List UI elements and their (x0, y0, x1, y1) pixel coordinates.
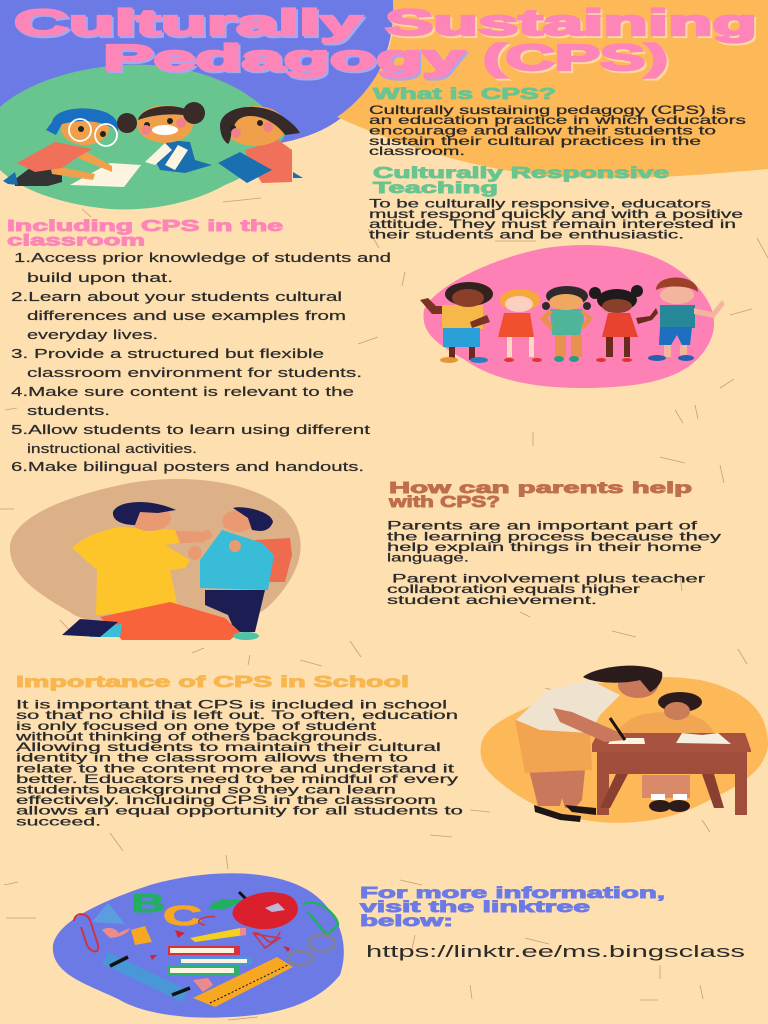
call to action (360, 885, 665, 930)
heading: parents: How can parents help (389, 480, 692, 497)
text: importance: allows an equal opportunity for all students to (16, 804, 464, 818)
text: parents: help explain things in their home (387, 540, 703, 554)
heading: importance: Importance of CPS in School (16, 674, 409, 691)
numbered list: 3. Provide a structured but flexible (11, 346, 324, 361)
heading: parents (388, 480, 692, 511)
numbered list: everyday lives. (27, 327, 158, 342)
illustration: school supplies on blue blob: B (131, 888, 165, 918)
illustration: children reading on green blob (0, 65, 303, 209)
numbered list: 6.Make bilingual posters and handouts. (11, 459, 364, 474)
numbered list: 1.Access prior knowledge of students and (14, 250, 391, 265)
illustration: teacher and student on orange blob (481, 666, 768, 823)
title (14, 2, 757, 78)
text: parents: language. (387, 550, 469, 564)
numbered list: 2.Learn about your students cultural (11, 289, 342, 304)
text: importance: Allowing students to maintain their cultural (16, 740, 441, 754)
text: importance: is only focused on one type of student (16, 719, 377, 733)
numbered list (11, 250, 391, 474)
numbered list: differences and use examples from (27, 308, 346, 323)
call to action: visit the linktree (360, 899, 591, 916)
illustration: school supplies on blue blob (53, 873, 344, 1018)
numbered list: 5.Allow students to learn using different (11, 422, 371, 437)
illustration: parent and child on tan blob (10, 479, 301, 640)
text: importance: succeed. (16, 814, 101, 828)
text: importance: identity in the classroom allows them to (16, 750, 409, 764)
title: (CPS) (483, 37, 668, 78)
illustration: five children on pink blob (420, 245, 725, 388)
text: importance (14, 698, 464, 828)
numbered list: classroom environment for students. (27, 365, 362, 380)
text: culturally responsive (369, 196, 744, 242)
title: Pedagogy (103, 37, 464, 78)
text: parents: student achievement. (387, 593, 597, 607)
heading: culturally responsive teaching: Teaching (373, 180, 498, 197)
heading: parents: with CPS? (388, 494, 500, 511)
heading: including CPS: Including CPS in the (7, 218, 284, 235)
call to action: For more information, (360, 885, 665, 902)
text: importance: effectively. Including CPS in the classroom (16, 793, 436, 807)
text: culturally responsive: must respond quickly and with a positive (369, 207, 744, 221)
numbered list: build upon that. (27, 270, 173, 285)
link: https://linktr.ee/ms.bingsclass (366, 942, 745, 961)
text: importance: without thinking of others backgrounds. (14, 730, 383, 744)
text: what is CPS: encourage and allow their students to (369, 124, 717, 138)
text: importance: relate to the content more and understand it (16, 762, 455, 776)
illustration: school supplies on blue blob: C (163, 900, 202, 931)
heading: including CPS (7, 218, 284, 250)
text: culturally responsive: To be culturally responsive, educators (369, 196, 711, 210)
heading: culturally responsive teaching (373, 165, 670, 197)
text: parents: Parent involvement plus teacher (392, 572, 705, 586)
text: importance: students background so they can learn (16, 782, 396, 796)
text: culturally responsive: their students and be enthusiastic. (369, 228, 684, 242)
heading: What is CPS: What is CPS? (373, 86, 556, 103)
text: parents (387, 518, 721, 607)
call to action: below: (360, 913, 453, 930)
text: importance: so that no child is left out. To often, education (16, 708, 458, 722)
title: Sustaining (385, 2, 757, 43)
numbered list: 4.Make sure content is relevant to the (11, 384, 354, 399)
text: parents: the learning process because they (387, 530, 721, 544)
text: what is CPS: sustain their cultural practices in the (369, 134, 702, 148)
purple header blob (0, 0, 393, 145)
text: culturally responsive: attitude. They must remain interested in (369, 217, 736, 231)
text: what is CPS: Culturally sustaining pedagogy (CPS) is (369, 103, 726, 117)
text: importance: better. Educators need to be mindful of every (16, 772, 458, 786)
heading: including CPS: classroom (7, 232, 145, 250)
text: parents: collaboration equals higher (387, 582, 640, 596)
text: importance: It is important that CPS is included in school (16, 698, 447, 712)
text: what is CPS: classroom. (369, 144, 465, 158)
text: what is CPS: an education practice in which educators (369, 113, 746, 127)
text: what is CPS (369, 103, 746, 158)
numbered list: students. (27, 403, 110, 418)
orange header blob (337, 0, 768, 178)
heading: culturally responsive teaching: Culturally Responsive (373, 165, 670, 182)
numbered list: instructional activities. (27, 441, 197, 456)
title: Culturally (14, 2, 362, 43)
text: parents: Parents are an important part of (387, 518, 698, 532)
